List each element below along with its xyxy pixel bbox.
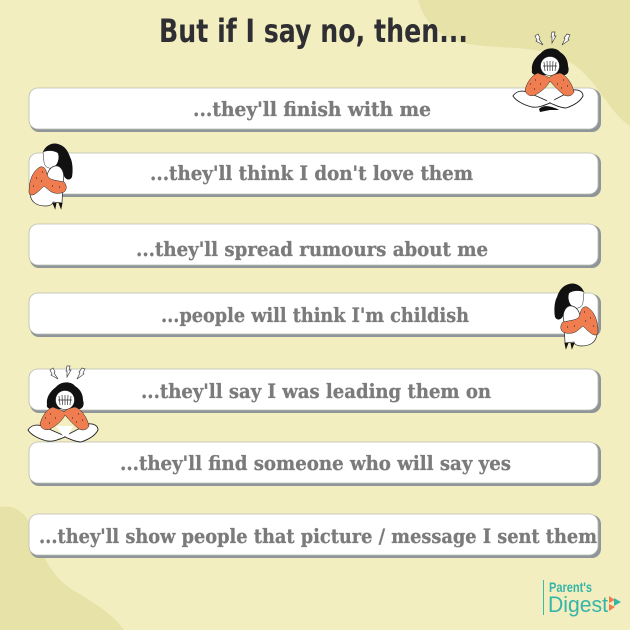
row 3: they'll spread rumours about me: ...they'll spread rumours about me bbox=[136, 237, 488, 261]
row 5: they'll say I was leading them on: ...they'll say I was leading them on bbox=[141, 379, 491, 403]
row 6: they'll find someone who will say yes bbox=[29, 442, 601, 486]
row 2: they'll think I don't love them bbox=[29, 153, 601, 197]
icon: woman hugging knees, row 2 bbox=[29, 143, 73, 208]
row 1: they'll finish with me bbox=[29, 88, 601, 132]
row 3: they'll spread rumours about me bbox=[29, 224, 601, 268]
logo: Parent's Digest: Digest bbox=[548, 592, 608, 617]
row 2: they'll think I don't love them: ...they'll think I don't love them bbox=[150, 161, 473, 185]
row 5: they'll say I was leading them on bbox=[29, 369, 601, 413]
icon: stressed woman sitting cross-legged, row 5 bbox=[28, 366, 98, 442]
logo: Parent's Digest bbox=[544, 579, 621, 617]
row 7: they'll show people that picture / message I sent them bbox=[29, 514, 601, 558]
logo: Parent's Digest: Parent's bbox=[549, 579, 592, 595]
row 1: they'll finish with me: ...they'll finish with me bbox=[193, 97, 431, 121]
row 4: people will think I'm childish bbox=[29, 293, 601, 337]
title: But if I say no, then... bbox=[159, 12, 468, 50]
row 6: they'll find someone who will say yes: ...they'll find someone who will say yes bbox=[120, 451, 511, 475]
icon: woman hugging knees, row 4 bbox=[554, 283, 598, 348]
row 4: people will think I'm childish: ...people will think I'm childish bbox=[161, 303, 469, 327]
icon: stressed woman sitting cross-legged, top right bbox=[513, 32, 583, 112]
